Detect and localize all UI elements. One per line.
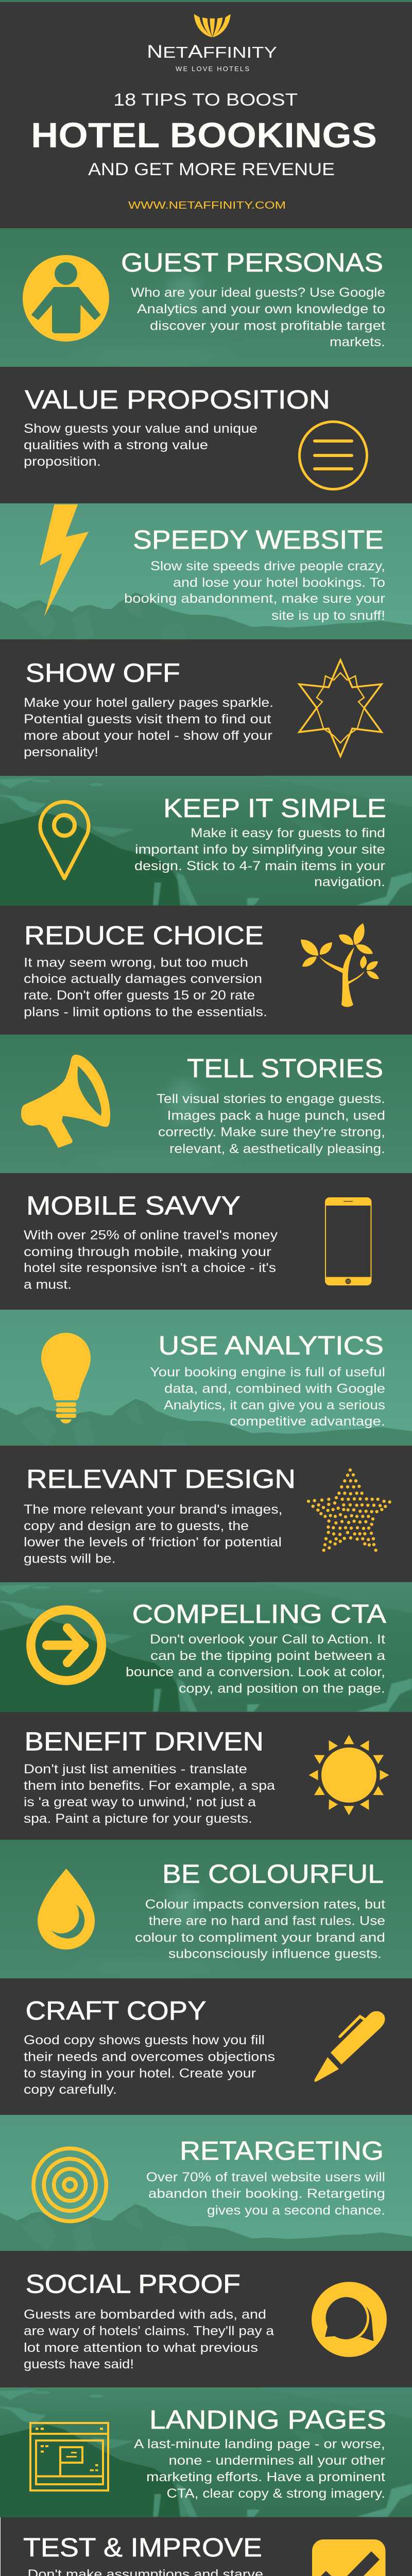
panel background <box>0 1035 412 1173</box>
text block: colour to compliment your brand and <box>135 1930 385 1945</box>
text block: discover your most profitable target <box>150 319 385 333</box>
text block: lot more attention to what previous <box>24 2341 258 2355</box>
text block: correctly. Make sure they're strong, <box>158 1125 385 1140</box>
text block: bounce and a conversion. Look at color, <box>126 1665 385 1680</box>
panel background <box>0 367 412 503</box>
panel background <box>0 776 412 906</box>
text block: Make it easy for guests to find <box>191 826 385 840</box>
panel: speedy website <box>0 503 412 639</box>
text block: Good copy shows guests how you fill <box>24 2033 265 2047</box>
text block: site is up to snuff! <box>271 608 385 623</box>
text block: design. Stick to 4-7 main items in your <box>134 859 385 873</box>
text block: none - undermines all your other <box>169 2453 385 2468</box>
text block: Over 70% of travel website users will <box>146 2170 385 2184</box>
text block: booking abandonment, make sure your <box>124 591 385 606</box>
panel: guest personas <box>0 228 412 367</box>
text block: Images pack a huge punch, used <box>167 1109 385 1123</box>
heading: BENEFIT DRIVEN <box>24 1727 264 1756</box>
icon: megaphone <box>21 1055 110 1148</box>
text block <box>134 826 385 889</box>
text block <box>131 285 385 349</box>
panel background <box>1 2517 412 2576</box>
text block: them into benefits. For example, a spa <box>24 1778 275 1793</box>
text block: qualities with a strong value <box>24 438 208 452</box>
panel background <box>0 1446 412 1582</box>
panel background <box>0 2251 412 2387</box>
text block: The more relevant your brand's images, <box>24 1502 282 1517</box>
text block <box>24 1502 282 1566</box>
text block: guests will be. <box>24 1552 115 1566</box>
text block: Guests are bombarded with ads, and <box>24 2307 266 2321</box>
icon: map pin <box>40 802 89 878</box>
icon: logo petals <box>194 14 231 37</box>
text block: abandon their booking. Retargeting <box>148 2187 385 2201</box>
panel: reduce choice <box>0 906 412 1035</box>
text block: copy, and position on the page. <box>179 1682 385 1696</box>
text block: It may seem wrong, but too much <box>24 955 248 970</box>
heading: SHOW OFF <box>26 658 180 687</box>
text block: relevant, & aesthetically pleasing. <box>169 1142 385 1156</box>
text block: rate. Don't offer guests 15 or 20 rate <box>24 988 255 1003</box>
text block: choice actually damages conversion <box>24 972 262 986</box>
text block <box>150 1365 385 1429</box>
text block: copy carefully. <box>24 2082 117 2097</box>
text block: Analytics and your own knowledge to <box>137 302 385 316</box>
icon: web page layout <box>30 2423 108 2490</box>
panel background <box>0 1310 412 1446</box>
text block: their needs and overcomes objections <box>24 2049 275 2064</box>
panel background <box>0 1582 412 1712</box>
panel: use analytics <box>0 1310 412 1446</box>
title: 18 tips to boost: 18 TIPS TO BOOST <box>113 90 298 110</box>
text block <box>134 2437 385 2501</box>
panel: craft copy <box>0 1978 412 2115</box>
heading: KEEP IT SIMPLE <box>163 793 386 823</box>
text block: Don't overlook your Call to Action. It <box>150 1632 385 1647</box>
text block: competitive advantage. <box>230 1414 385 1429</box>
heading: REDUCE CHOICE <box>24 921 264 950</box>
text block: navigation. <box>314 875 385 889</box>
text block <box>126 1632 385 1696</box>
text block: can be the tipping point between a <box>150 1649 385 1663</box>
icon: light bulb <box>41 1333 91 1423</box>
text block: guests have said! <box>24 2357 134 2371</box>
panel: relevant design <box>0 1446 412 1582</box>
text block: Potential guests visit them to find out <box>24 712 271 726</box>
panel: show off <box>0 639 412 776</box>
panel: social proof <box>0 2251 412 2387</box>
top green strip <box>0 0 412 2</box>
icon: water drop <box>38 1869 95 1950</box>
icon: speech bubbles <box>312 2282 387 2357</box>
heading: BE COLOURFUL <box>162 1859 384 1889</box>
text block <box>24 1228 278 1292</box>
heading: RELEVANT DESIGN <box>26 1464 296 1494</box>
website url: WWW.NETAFFINITY.COM <box>128 199 286 211</box>
panel: header <box>0 0 412 211</box>
heading: GUEST PERSONAS <box>121 248 383 277</box>
text block: important info by simplifying your site <box>135 842 385 857</box>
icon: lightning bolt <box>40 504 89 617</box>
text block: markets. <box>330 335 385 349</box>
heading: MOBILE SAVVY <box>26 1191 241 1221</box>
panel: keep it simple <box>0 776 412 906</box>
text block: subconsciously influence guests. <box>168 1946 382 1961</box>
text block: With over 25% of online travel's money <box>24 1228 278 1243</box>
text block: proposition. <box>24 454 101 469</box>
text block: and lose your hotel bookings. To <box>173 575 385 590</box>
text block: Show guests your value and unique <box>24 421 258 436</box>
text block <box>146 2170 385 2217</box>
panel: value proposition <box>0 367 412 503</box>
icon: checkbox <box>312 2539 385 2576</box>
heading: SOCIAL PROOF <box>26 2269 241 2299</box>
text block: Who are your ideal guests? Use Google <box>131 285 385 300</box>
panel background <box>0 228 412 367</box>
icon: person <box>23 255 109 342</box>
text block: Don't just list amenities - translate <box>24 1762 247 1776</box>
icon: circled menu <box>300 421 367 489</box>
heading: RETARGETING <box>180 2136 384 2165</box>
panel: compelling cta <box>0 1582 412 1712</box>
panel: tell stories <box>0 1035 412 1173</box>
text block <box>24 421 258 469</box>
text block: marketing efforts. Have a prominent <box>146 2470 385 2484</box>
panel background <box>0 1840 412 1978</box>
heading: SPEEDY WEBSITE <box>133 525 384 554</box>
text block: Your booking engine is full of useful <box>150 1365 385 1379</box>
text block: personality! <box>24 745 98 759</box>
text block: lower the levels of 'friction' for potential <box>24 1535 282 1550</box>
text block: hotel site responsive isn't a choice - it's <box>24 1261 276 1275</box>
icon: arrow in circle <box>31 1610 101 1681</box>
panel background <box>0 503 412 639</box>
heading: LANDING PAGES <box>149 2405 386 2434</box>
heading: TELL STORIES <box>187 1054 383 1083</box>
logo wordmark: NET AFFINITY <box>147 42 277 62</box>
panel: retargeting <box>0 2115 412 2251</box>
text block: to staying in your hotel. Create your <box>24 2066 256 2081</box>
icon: smartphone <box>325 1197 372 1285</box>
icon: target <box>33 2148 106 2221</box>
text block <box>24 2307 274 2371</box>
text block: spa. Paint a picture for your guests. <box>24 1811 252 1826</box>
text block: data, and, combined with Google <box>164 1382 385 1396</box>
text block: coming through mobile, making your <box>24 1245 271 1259</box>
heading: COMPELLING CTA <box>132 1599 386 1629</box>
title: and get more revenue: AND GET MORE REVENUE <box>88 160 335 179</box>
heading: CRAFT COPY <box>26 1996 206 2025</box>
panel background <box>0 1173 412 1310</box>
text block: there are no hard and fast rules. Use <box>149 1914 385 1928</box>
text block <box>124 559 385 623</box>
text block <box>24 696 273 759</box>
text block <box>157 1092 385 1156</box>
text block: plans - limit options to the essentials. <box>24 1005 267 1019</box>
icon: sun <box>309 1735 389 1815</box>
text block: Slow site speeds drive people crazy, <box>150 559 385 573</box>
panel: landing pages <box>0 2387 412 2517</box>
panel: test and improve <box>1 2517 412 2576</box>
logo: NetAffinity <box>147 14 277 73</box>
panel background <box>0 906 412 1035</box>
panel background <box>0 639 412 776</box>
text block: more about your hotel - show off your <box>24 728 272 743</box>
panel: mobile savvy <box>0 1173 412 1310</box>
panel: be colourful <box>0 1840 412 1978</box>
text block <box>24 1762 275 1826</box>
text block: A last-minute landing page - or worse, <box>134 2437 385 2451</box>
text block <box>135 1897 385 1961</box>
logo tagline: WE LOVE HOTELS <box>176 65 249 73</box>
text block: Make your hotel gallery pages sparkle. <box>24 696 273 710</box>
text block: a must. <box>24 1278 72 1292</box>
panel background <box>0 2115 412 2251</box>
text block: is 'a great way to unwind,' not just a <box>24 1795 256 1809</box>
icon: tree branch <box>301 923 379 1007</box>
title: hotel bookings: HOTEL BOOKINGS <box>31 115 377 155</box>
panel background <box>0 2387 412 2517</box>
text block: Analytics, it can give you a serious <box>164 1398 385 1413</box>
heading: TEST & IMPROVE <box>23 2533 262 2562</box>
text block: CTA, clear copy & strong imagery. <box>167 2486 385 2501</box>
text block <box>24 955 267 1019</box>
heading: USE ANALYTICS <box>159 1331 384 1360</box>
heading: VALUE PROPOSITION <box>25 385 330 414</box>
panel background <box>0 1712 412 1840</box>
text block: Tell visual stories to engage guests. <box>157 1092 385 1106</box>
text block: are wary of hotels' claims. They'll pay a <box>24 2324 274 2338</box>
icon: star of dots <box>308 1470 390 1550</box>
text block <box>24 2033 275 2097</box>
text block: copy and design are to guests, the <box>24 1519 249 1533</box>
panel background <box>0 1978 412 2115</box>
icon: pen <box>314 2011 385 2082</box>
icon: sparkle star <box>299 660 382 756</box>
text block: Colour impacts conversion rates, but <box>145 1897 385 1912</box>
panel: benefit driven <box>0 1712 412 1840</box>
text block: gives you a second chance. <box>207 2203 385 2217</box>
